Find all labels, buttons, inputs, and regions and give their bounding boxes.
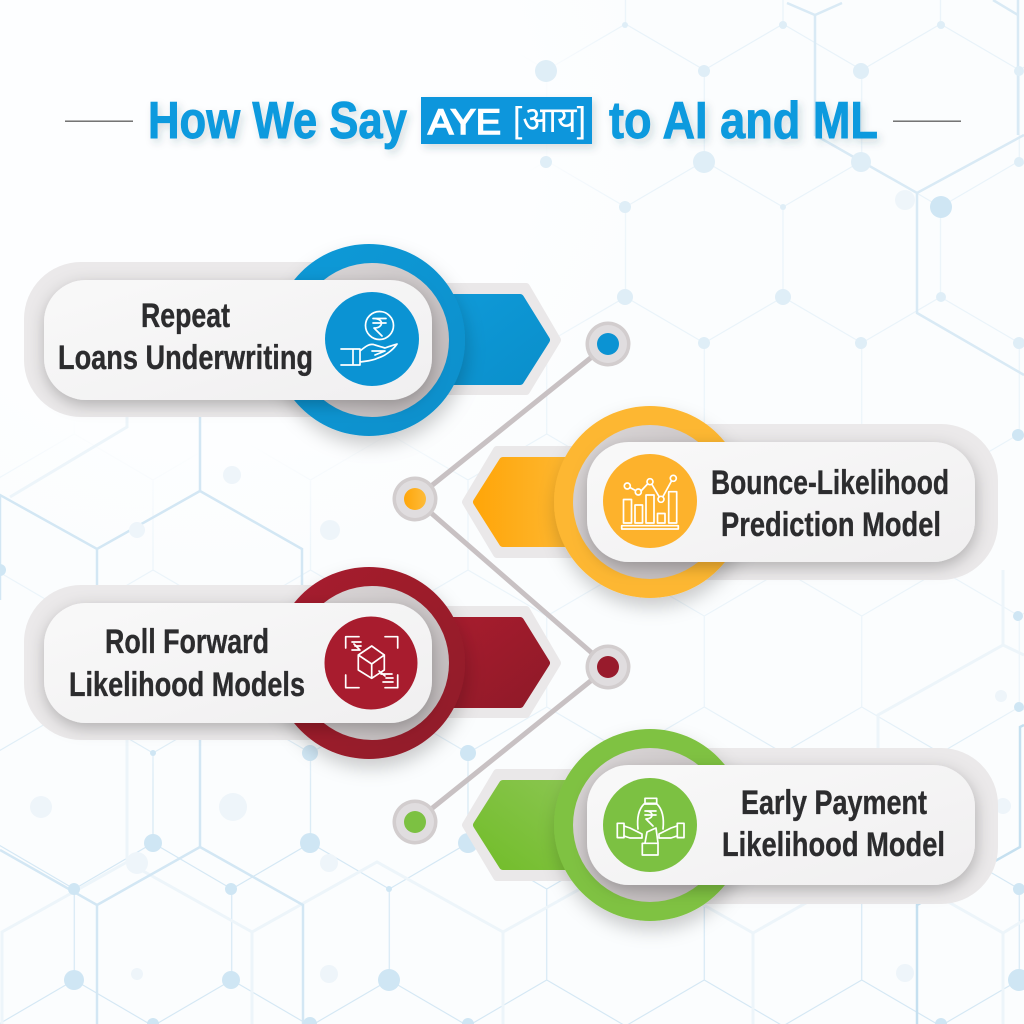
icon: rupee in open hand — [341, 312, 397, 365]
icon: cube in focus frame — [346, 637, 398, 688]
label: roll forward likelihood models — [69, 623, 305, 704]
title rule right — [893, 120, 961, 122]
logo box — [421, 97, 592, 144]
label: early payment likelihood model — [722, 784, 945, 864]
label: bounce-likelihood prediction model — [711, 464, 949, 544]
node blue — [586, 322, 630, 366]
label: repeat loans underwriting: Loans Underwriting — [58, 339, 313, 377]
panel: early payment likelihood model — [466, 729, 998, 921]
panel: bounce-likelihood prediction model — [466, 406, 998, 598]
label: early payment likelihood model: Early Payment — [741, 784, 927, 822]
logo box: AYE — [428, 103, 501, 142]
icon: hands holding money bag — [617, 798, 684, 855]
node maroon — [586, 644, 630, 690]
label: roll forward likelihood models: Roll Forward — [105, 623, 269, 661]
node orange — [392, 476, 438, 522]
label: bounce-likelihood prediction model: Bounce-Likelihood — [711, 464, 949, 502]
label: repeat loans underwriting: Repeat — [141, 297, 230, 335]
label: bounce-likelihood prediction model: Prediction Model — [721, 506, 941, 544]
connector lines — [415, 344, 608, 822]
label: early payment likelihood model: Likelihood Model — [722, 826, 945, 864]
label: repeat loans underwriting — [58, 297, 313, 377]
title — [65, 92, 961, 150]
panel: repeat loans underwriting — [24, 244, 557, 436]
title rule left — [65, 120, 133, 122]
logo box: [आय] — [513, 99, 586, 140]
label: roll forward likelihood models: Likelihood Models — [69, 666, 305, 704]
title text to ai and ml: to AI and ML — [609, 92, 878, 150]
icon: bar chart with trend line — [622, 475, 678, 529]
title text how we say: How We Say — [148, 92, 407, 150]
node green — [392, 800, 438, 844]
panel: roll forward likelihood models — [24, 567, 557, 759]
